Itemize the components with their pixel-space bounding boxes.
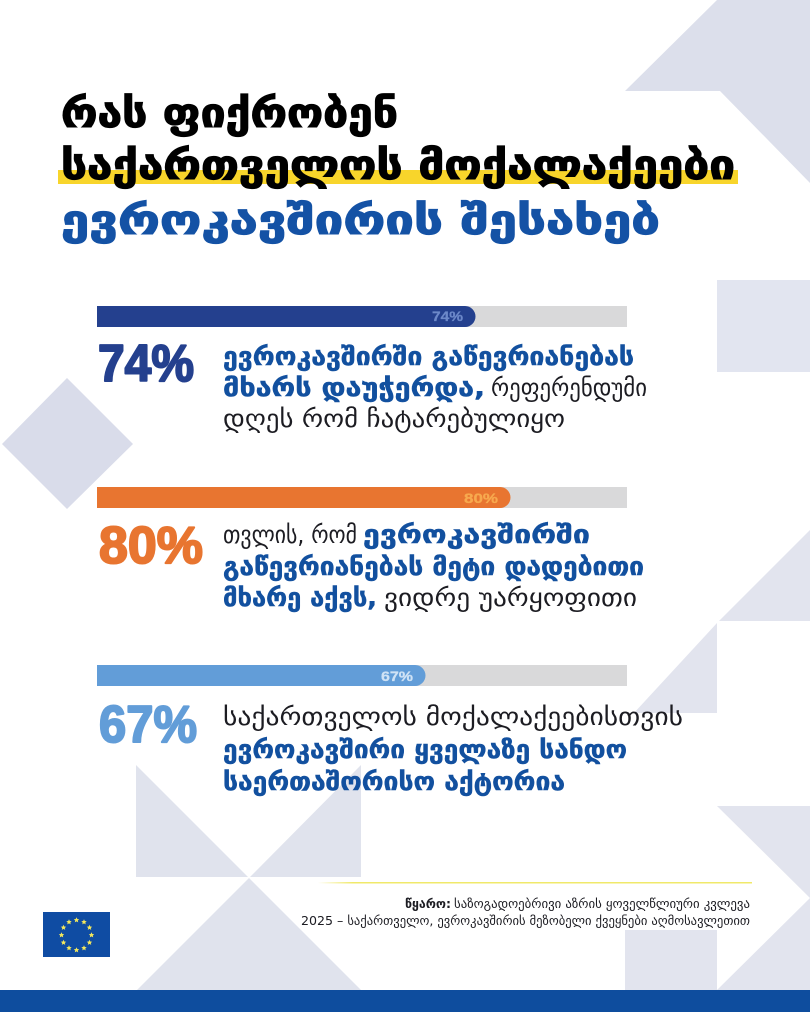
bar track (97, 306, 627, 327)
description: ვიდრე უარყოფითი (384, 583, 637, 612)
title line 3: ევროკავშირის შესახებ (61, 198, 660, 244)
bar track (97, 487, 627, 508)
panel: 67 percent (97, 665, 683, 796)
description: ევროკავშირში (363, 520, 590, 549)
big number: 80% (99, 517, 203, 575)
source note: 2025 – საქართველო, ევროკავშირის მეზობელი ქვეყნები აღმოსავლეთით (301, 913, 750, 928)
description (223, 702, 683, 796)
description (223, 520, 644, 612)
panel: 80 percent (97, 487, 644, 612)
big number: 67% (99, 696, 197, 754)
icon: EU flag (43, 912, 110, 957)
title line 1: რას ფიქრობენ (61, 91, 398, 137)
source note: წყარო: (405, 896, 451, 911)
bar track (97, 665, 627, 686)
big number: 74% (98, 335, 194, 393)
description: თვლის, რომ (223, 520, 357, 549)
description: ევროკავშირში გაწევრიანებას (223, 342, 634, 371)
description: გაწევრიანებას მეტი დადებითი (223, 552, 644, 581)
description: რეფერენდუმი (491, 373, 647, 402)
bar label: 80% (464, 491, 498, 506)
description: საერთაშორისო აქტორია (223, 767, 565, 796)
bar label: 74% (432, 309, 463, 324)
title (58, 91, 738, 244)
description: საქართველოს მოქალაქეებისთვის (223, 702, 683, 731)
bar label: 67% (381, 669, 413, 684)
bar fill 67% (97, 665, 426, 686)
title highlight bar (58, 170, 738, 184)
description (223, 342, 647, 433)
source note: საზოგადოებრივი აზრის ყოველწლიური კვლევა (454, 896, 750, 911)
description: დღეს რომ ჩატარებულიყო (223, 404, 565, 433)
source note (301, 882, 752, 928)
bar fill 74% (97, 306, 476, 327)
title line 2: საქართველოს მოქალაქეები (61, 143, 735, 189)
description: ევროკავშირი ყველაზე სანდო (223, 735, 627, 764)
description: მხარე აქვს, (223, 583, 377, 612)
description: მხარს დაუჭერდა, (223, 373, 485, 402)
footer band (0, 990, 810, 1012)
bar fill 80% (97, 487, 510, 508)
panel: 74 percent (97, 306, 647, 433)
